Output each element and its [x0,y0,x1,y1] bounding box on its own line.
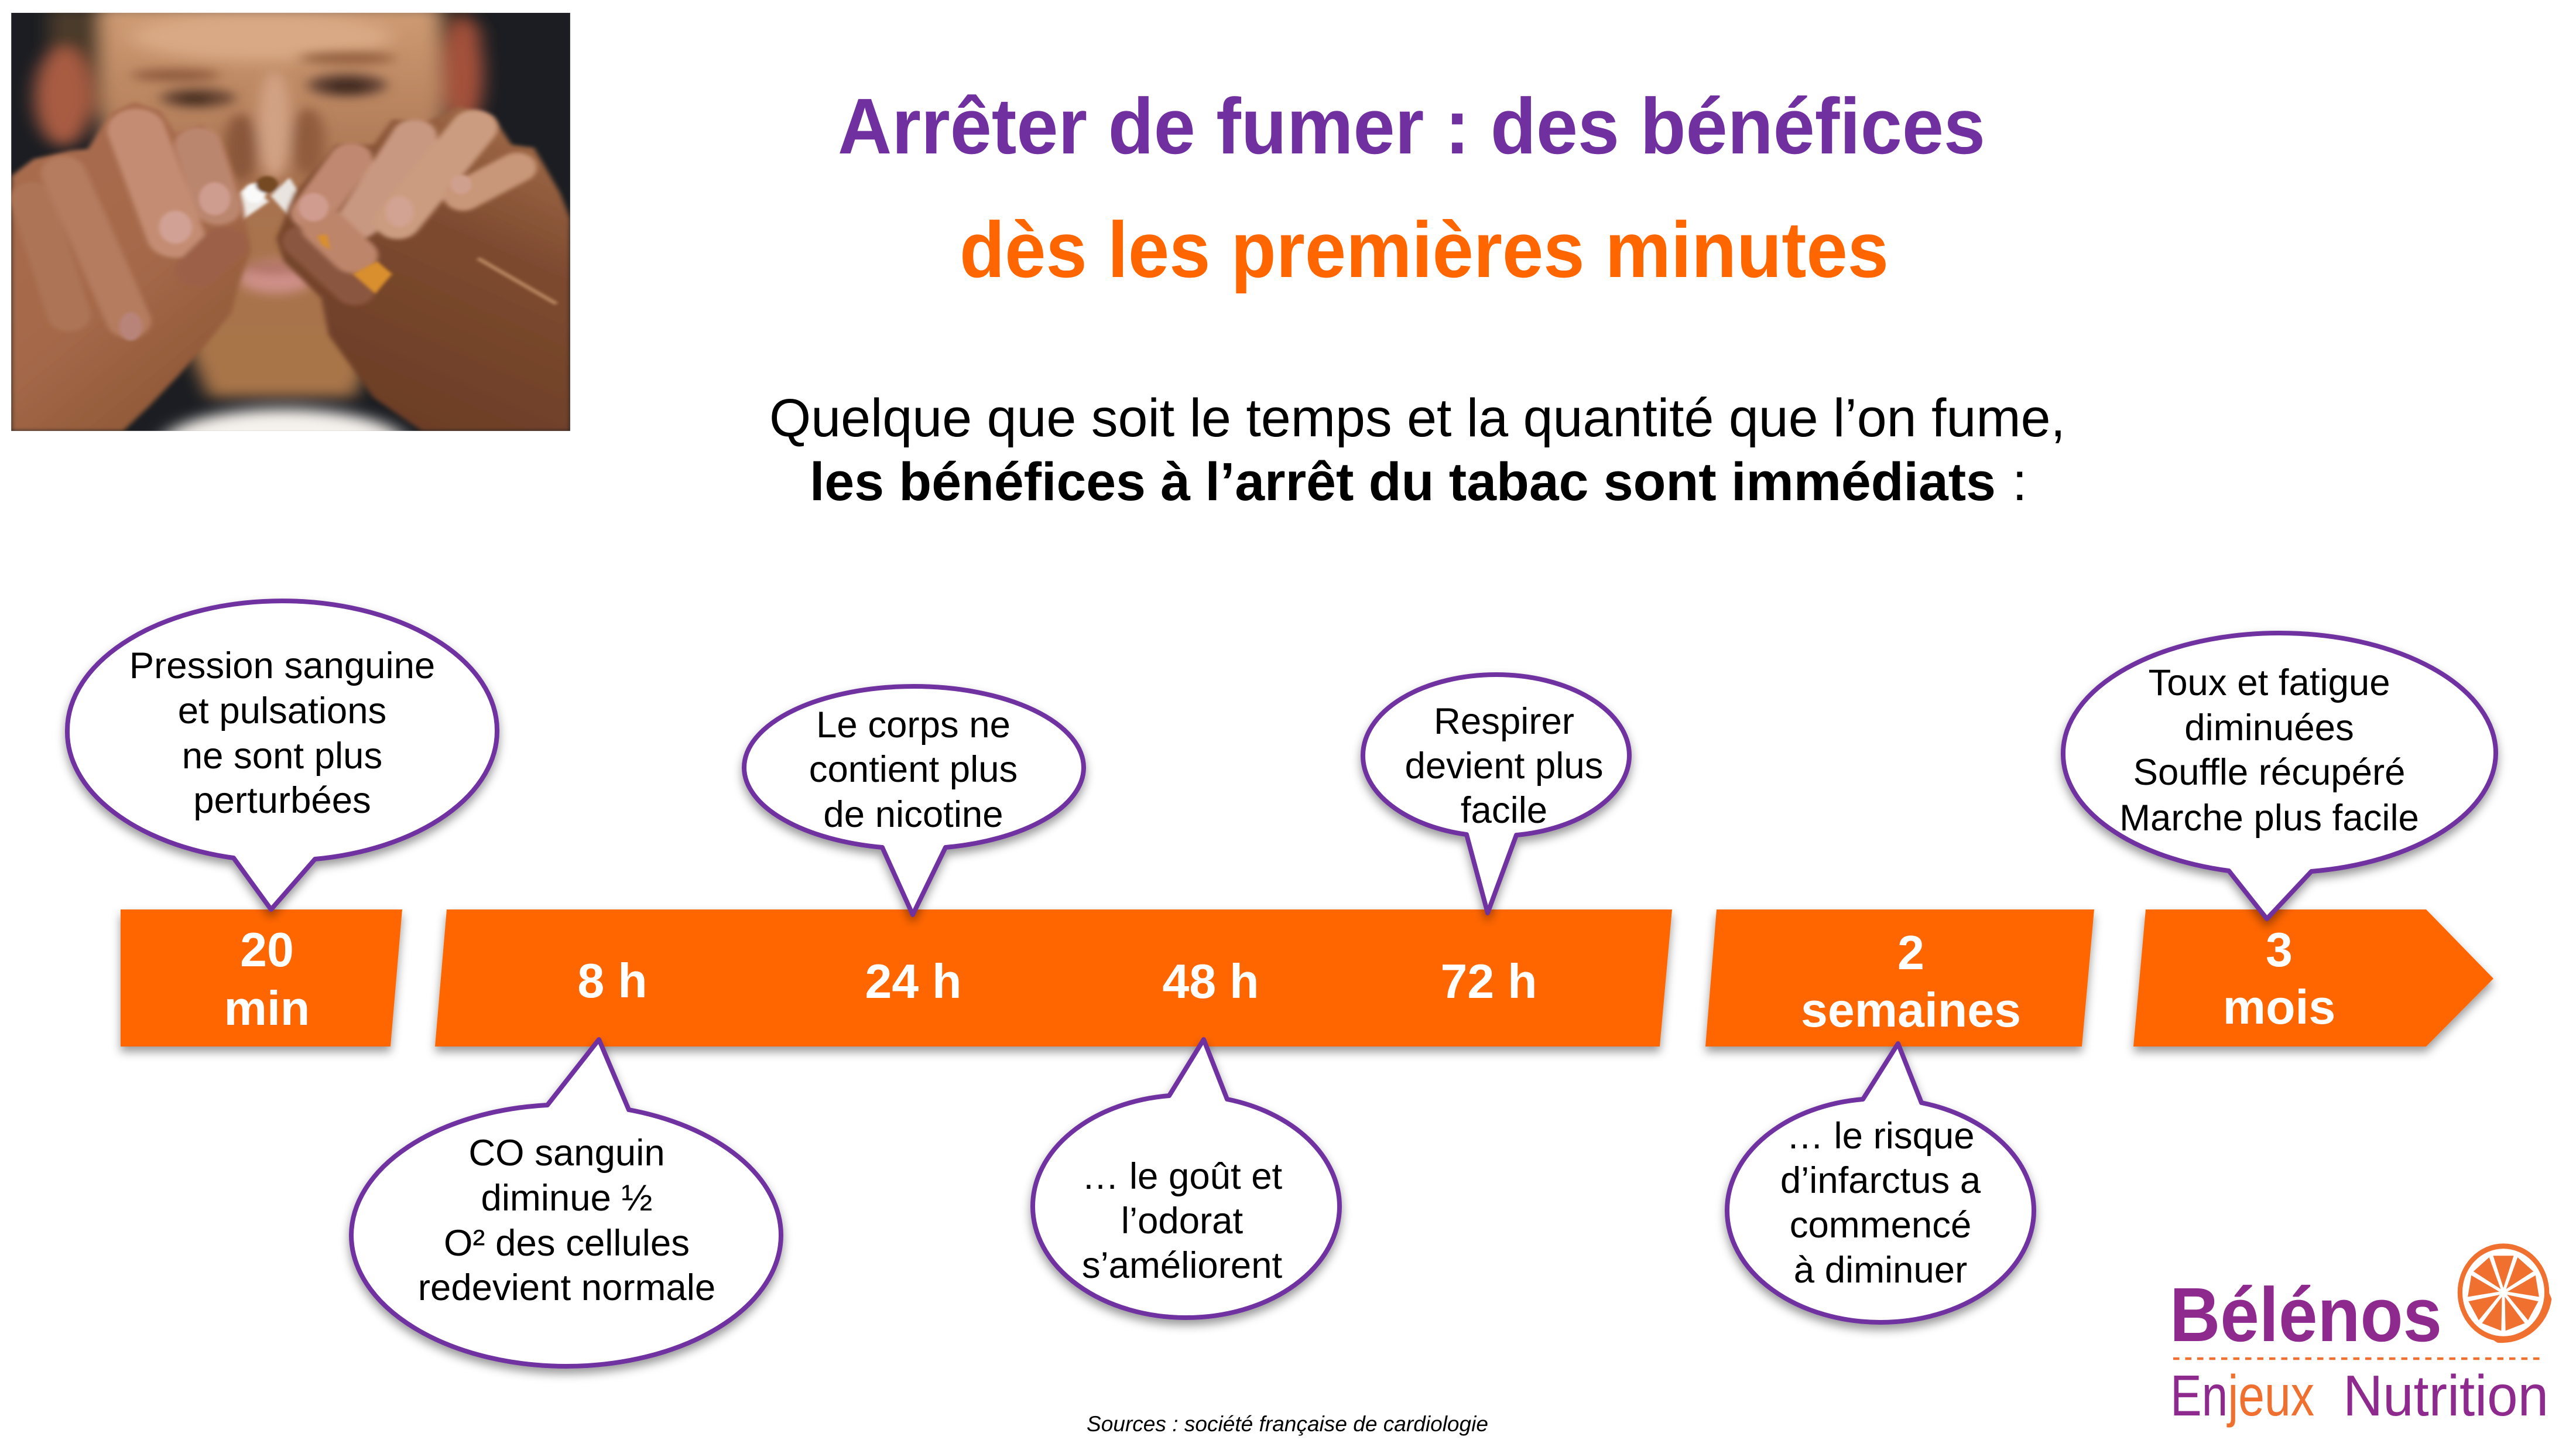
callout: 3 mois: Souffle récupéré [2133,752,2405,793]
callout: 48 h: s’améliorent [1082,1245,1283,1286]
callout: 20 min [67,601,497,909]
callout: 3 mois: Toux et fatigue [2148,662,2390,703]
callout: 24 h [744,686,1084,915]
timeline labels: 48 h [1162,955,1259,1008]
timeline labels: mois [2223,980,2335,1034]
logo: Bélénos Enjeux Nutrition: Bélénos [2170,1271,2442,1357]
callout: 2 semaines [1727,1044,2034,1322]
callout: 24 h: Le corps ne [816,705,1010,745]
timeline labels: semaines [1801,983,2021,1037]
cigarette [238,175,299,220]
callout: 72 h: facile [1461,790,1547,831]
timeline labels: 2 [1897,926,1924,980]
callout: 2 semaines: … le risque [1786,1116,1975,1157]
subtitle: : [2012,452,2027,512]
callout: 8 h: redevient normale [418,1267,715,1308]
callout: 48 h [1033,1039,1340,1318]
callout: 2 semaines: commencé [1790,1205,1971,1246]
source note: Sources : société française de cardiologie [1087,1412,1488,1436]
timeline labels: 8 h [577,954,648,1008]
callout: 72 h: devient plus [1405,745,1603,786]
subtitle: les bénéfices à l’arrêt du tabac sont immédiats [810,452,1996,512]
logo: Bélénos Enjeux Nutrition [2170,1246,2551,1428]
callout: 20 min: Pression sanguine [129,645,435,686]
callout: 20 min: perturbées [193,780,371,821]
title: dès les premières minutes [960,206,1889,294]
logo: Bélénos Enjeux Nutrition: Enjeux [2170,1363,2314,1428]
title [838,82,1985,294]
callout: 3 mois: Marche plus facile [2119,798,2419,839]
callout: 2 semaines: à diminuer [1794,1250,1967,1291]
icon: orange slice [2460,1246,2551,1343]
title: Arrêter de fumer : des bénéfices [838,82,1985,170]
callout: 72 h [1363,675,1629,913]
callout: 48 h: l’odorat [1121,1201,1243,1242]
callout: 8 h: diminue ½ [481,1178,652,1219]
callout: 20 min: et pulsations [178,690,386,731]
subtitle [769,388,2065,512]
callout: 8 h: CO sanguin [468,1133,665,1174]
timeline labels: 72 h [1440,955,1537,1008]
callout: 3 mois: diminuées [2184,707,2354,748]
timeline labels [224,923,2335,1037]
timeline labels: 24 h [865,955,962,1008]
callout: 8 h [351,1039,781,1366]
timeline arrow bars [121,909,2493,1047]
timeline labels: 3 [2266,923,2293,977]
callout: 8 h: O² des cellules [444,1223,690,1264]
logo: Bélénos Enjeux Nutrition: Nutrition [2343,1363,2548,1428]
callout: 2 semaines: d’infarctus a [1780,1160,1981,1201]
callout: 3 mois [2063,633,2496,919]
callout: 20 min: ne sont plus [182,736,382,777]
photo: hands breaking a cigarette [11,13,570,431]
callout: 24 h: de nicotine [823,794,1003,835]
callout: 72 h: Respirer [1434,701,1574,742]
callout: 24 h: contient plus [809,749,1018,790]
timeline labels: min [224,982,310,1035]
callout: 48 h: … le goût et [1082,1156,1283,1197]
timeline labels: 20 [240,923,294,977]
subtitle: Quelque que soit le temps et la quantité que l’on fume, [769,388,2065,448]
